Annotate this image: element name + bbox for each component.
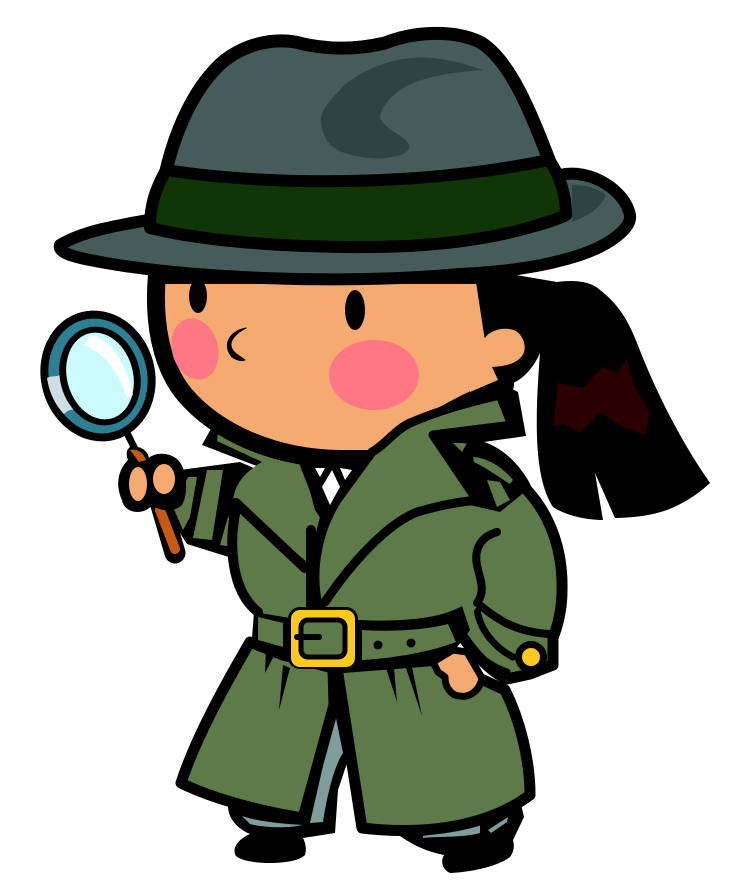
icon: hand on hip xyxy=(433,650,482,696)
icon: magnifying glass xyxy=(26,297,186,553)
icon: ponytail xyxy=(470,268,710,520)
icon: button on cuff xyxy=(515,641,547,673)
cheeks xyxy=(329,340,419,410)
panel: coat left skirt xyxy=(181,642,334,818)
panel: coat left collar xyxy=(202,425,340,585)
hat brim xyxy=(60,174,630,279)
hat crown xyxy=(150,33,565,245)
belt xyxy=(252,606,470,669)
hat band xyxy=(150,160,566,247)
shirt and tie xyxy=(300,453,375,525)
hand xyxy=(118,447,186,512)
hat swoosh xyxy=(321,58,483,158)
panel: coat arm xyxy=(400,447,562,679)
icon: fedora hat xyxy=(60,33,630,279)
ear xyxy=(470,329,525,392)
icon: trousers and shoes xyxy=(228,700,524,873)
panel: coat right skirt xyxy=(337,660,530,831)
icon: left sleeve xyxy=(165,462,258,558)
panel: coat torso xyxy=(232,490,505,632)
belt buckle xyxy=(288,607,358,669)
face xyxy=(156,275,525,459)
cuff lines xyxy=(458,610,513,672)
mouth xyxy=(227,328,246,360)
eyes xyxy=(189,279,207,313)
sleeve fold xyxy=(476,532,550,634)
panel: coat right lapel xyxy=(300,385,527,605)
